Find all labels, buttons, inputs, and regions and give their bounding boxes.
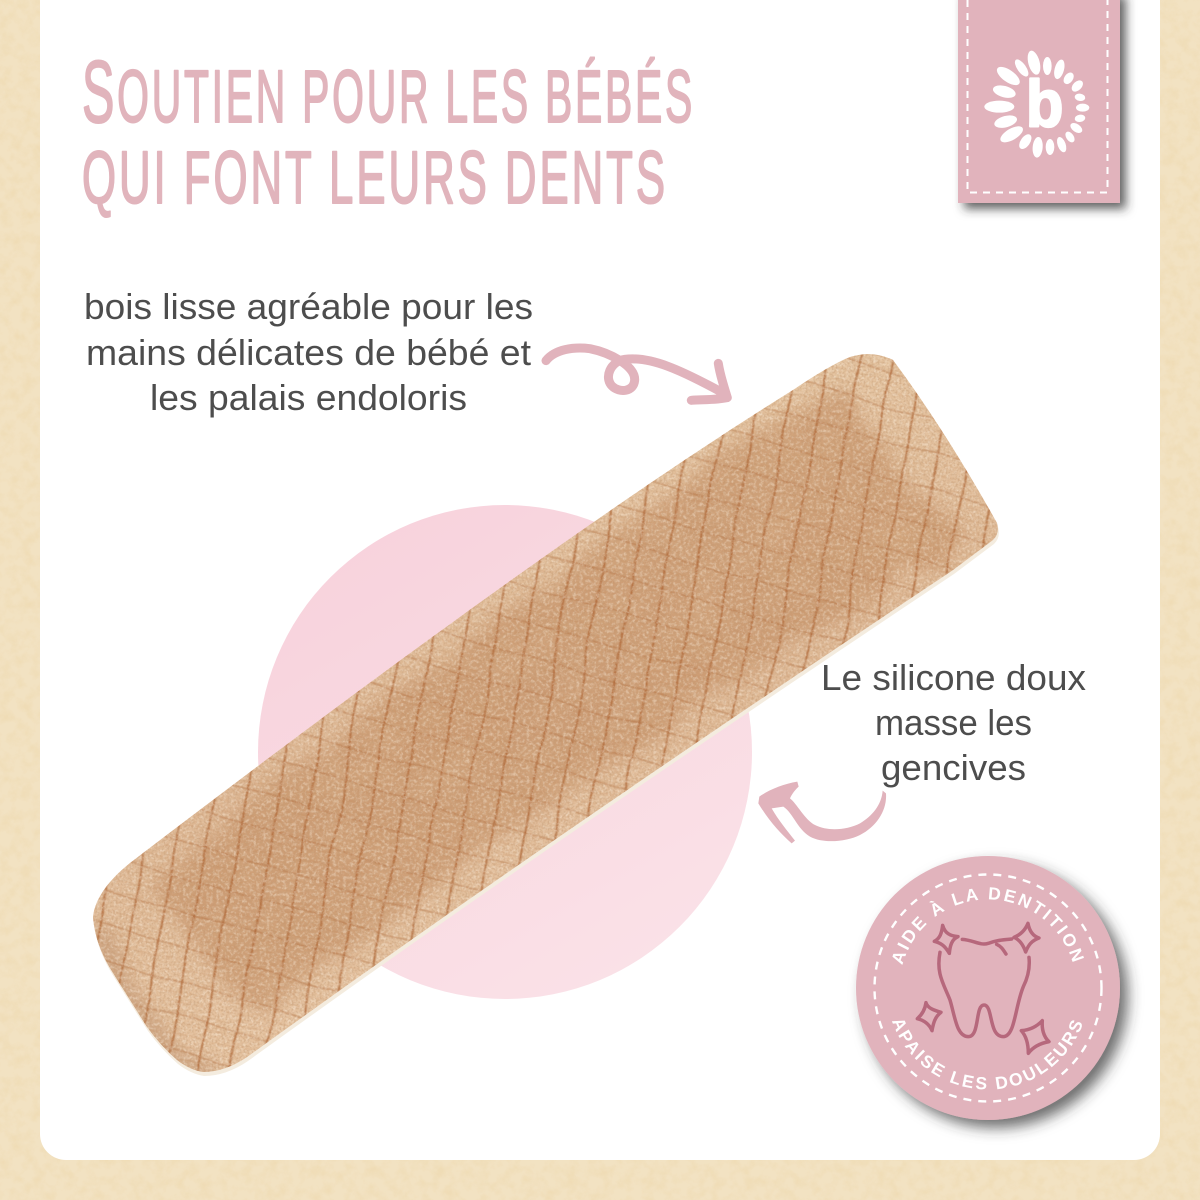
arrow: to wood [546,348,727,400]
text: wood callout: bois lisse agréable pour les [84,286,533,327]
arrow: to silicone [758,782,886,843]
silicone disc [258,505,752,999]
icon: tooth with sparkles [917,923,1049,1053]
text: wood callout [84,286,533,418]
text: silicone callout [821,657,1086,788]
title: SOUTIEN POUR LES BÉBÉS [82,42,695,141]
text: silicone callout: masse les [875,702,1032,743]
text: silicone callout: gencives [881,747,1026,788]
icon: brand flower logo: b [1026,67,1063,141]
title: QUI FONT LEURS DENTS [82,136,668,219]
badge text: bottom: APAISE LES DOULEURS [892,1020,1082,1090]
brand tag [958,0,1120,203]
text: wood callout: mains délicates de bébé et [86,332,531,373]
text: silicone callout: Le silicone doux [821,657,1086,698]
wooden bar [93,354,999,1076]
title [82,42,695,219]
badge [853,853,1139,1139]
icon: brand flower logo [984,49,1089,158]
text: wood callout: les palais endoloris [150,377,467,418]
badge text: top: AIDE À LA DENTITION [892,887,1084,965]
